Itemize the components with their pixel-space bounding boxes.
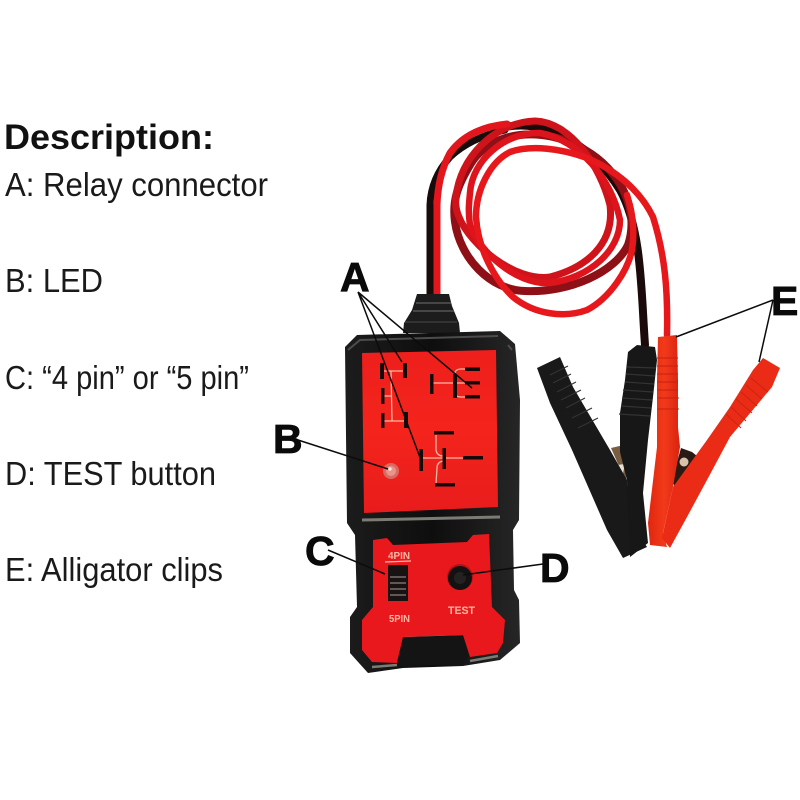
letter C: C	[305, 528, 335, 574]
legend D: D: TEST button	[5, 455, 216, 492]
callout line B	[298, 440, 388, 469]
main red strand to clip	[476, 148, 667, 335]
red coil strand 1	[456, 121, 611, 277]
heading: description: Description:	[4, 118, 214, 157]
strain relief	[403, 294, 460, 333]
letter A: A	[340, 254, 370, 300]
test button	[447, 564, 473, 590]
legend C: C: “4 pin” or “5 pin”	[5, 359, 249, 396]
label: 5 pin: 5PIN	[389, 613, 410, 625]
alligator clips	[537, 335, 780, 558]
callout lines E	[676, 300, 773, 362]
dark coil strand	[500, 126, 645, 345]
letter B: B	[273, 416, 303, 462]
legend E: E: Alligator clips	[5, 551, 223, 588]
letter E: E	[771, 278, 798, 324]
red lead from device	[437, 124, 507, 295]
label: test: TEST	[448, 605, 475, 617]
legend A: A: Relay connector	[5, 166, 268, 203]
body bevel highlights	[348, 336, 512, 667]
legend B: B: LED	[5, 262, 103, 299]
label: 4 pin: 4PIN	[388, 550, 410, 562]
LED	[383, 463, 399, 479]
pin switch	[388, 565, 408, 601]
dark red coil	[454, 134, 631, 291]
jaw detail	[611, 444, 628, 482]
relay diagram traces	[384, 369, 466, 484]
callout lines A	[358, 292, 472, 460]
upper red panel	[362, 350, 498, 513]
body outline	[345, 331, 520, 673]
lower red panel	[362, 534, 505, 663]
black lead from device	[430, 130, 505, 295]
red coil strand 2	[469, 133, 620, 283]
cables: coiled red and black leads	[430, 121, 667, 345]
callout letters	[273, 254, 798, 591]
relay connector slots	[380, 363, 483, 486]
red clip	[648, 335, 780, 548]
device: relay tester	[345, 294, 520, 673]
text block: legend of parts	[5, 166, 268, 588]
callout line D	[463, 564, 543, 575]
black clip	[537, 345, 657, 558]
letter D: D	[540, 545, 570, 591]
callout lines	[298, 292, 773, 575]
callout line C	[328, 550, 385, 574]
notch	[397, 636, 469, 666]
